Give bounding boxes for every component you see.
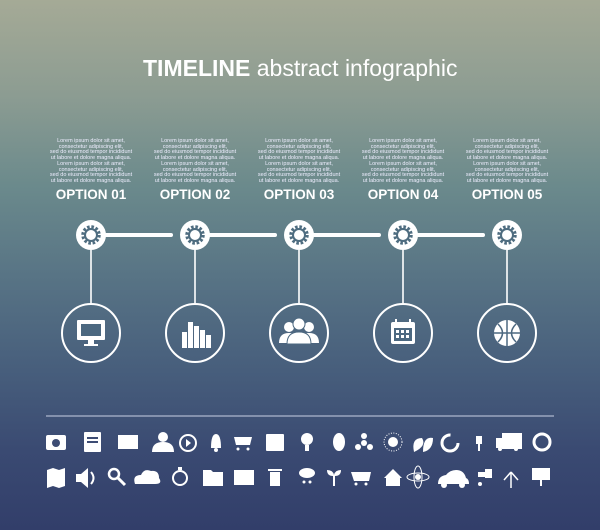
text block 3: consectetur adipiscing elit, [267,167,331,173]
text block 1: consectetur adipiscing elit, [59,167,123,173]
text block 5: Lorem ipsum dolor sit amet, [473,138,541,144]
text block 2: sed do eiusmod tempor incididunt [154,172,236,178]
text block 1: Lorem ipsum dolor sit amet, [57,138,125,144]
text block 5: consectetur adipiscing elit, [475,144,539,150]
option 01 label: OPTION 01 [56,187,126,202]
text block 4 [362,138,444,184]
text block 2: Lorem ipsum dolor sit amet, [161,161,229,167]
text block 5: consectetur adipiscing elit, [475,167,539,173]
text block 4: ut labore et dolore magna aliqua. [363,178,443,184]
icon row 2 [47,466,550,488]
text block 3 [258,138,340,184]
text block 5: sed do eiusmod tempor incididunt [466,172,548,178]
option 05 label: OPTION 05 [472,187,542,202]
option 04 label: OPTION 04 [368,187,438,202]
icon row 1 [46,432,550,452]
text block 2: consectetur adipiscing elit, [163,144,227,150]
text block 5: sed do eiusmod tempor incididunt [466,149,548,155]
text block 2: consectetur adipiscing elit, [163,167,227,173]
text block 4: consectetur adipiscing elit, [371,144,435,150]
text block 2 [154,138,236,184]
text block 3: ut labore et dolore magna aliqua. [259,155,339,161]
text block 5 [466,138,548,184]
text block 1: sed do eiusmod tempor incididunt [50,172,132,178]
text block 1: ut labore et dolore magna aliqua. [51,178,131,184]
icon: monitor [77,320,105,346]
text block 2: ut labore et dolore magna aliqua. [155,155,235,161]
text block 3: Lorem ipsum dolor sit amet, [265,161,333,167]
icon: globe [494,320,520,346]
text block 4: sed do eiusmod tempor incididunt [362,149,444,155]
text block 1: sed do eiusmod tempor incididunt [50,149,132,155]
text block 5: Lorem ipsum dolor sit amet, [473,161,541,167]
text block 3: ut labore et dolore magna aliqua. [259,178,339,184]
text block 1 [50,138,132,184]
text block 3: sed do eiusmod tempor incididunt [258,149,340,155]
divider [46,415,554,417]
text block 3: Lorem ipsum dolor sit amet, [265,138,333,144]
text block 1: ut labore et dolore magna aliqua. [51,155,131,161]
option 03 label: OPTION 03 [264,187,334,202]
icon: bar chart [182,322,211,348]
text block 4: Lorem ipsum dolor sit amet, [369,161,437,167]
text block 5: ut labore et dolore magna aliqua. [467,155,547,161]
text block 4: ut labore et dolore magna aliqua. [363,155,443,161]
text block 2: ut labore et dolore magna aliqua. [155,178,235,184]
text block 4: consectetur adipiscing elit, [371,167,435,173]
big circles [62,304,536,362]
timeline line [106,233,483,237]
gear nodes [76,220,522,250]
text block 3: sed do eiusmod tempor incididunt [258,172,340,178]
text block 4: Lorem ipsum dolor sit amet, [369,138,437,144]
title: TIMELINE abstract infographic [143,55,457,81]
text block 3: consectetur adipiscing elit, [267,144,331,150]
text block 1: Lorem ipsum dolor sit amet, [57,161,125,167]
icon: people [279,318,319,344]
vertical connectors [91,250,507,304]
text block 5: ut labore et dolore magna aliqua. [467,178,547,184]
icon: calendar [391,319,415,344]
option 02 label: OPTION 02 [160,187,230,202]
text block 1: consectetur adipiscing elit, [59,144,123,150]
text block 2: sed do eiusmod tempor incididunt [154,149,236,155]
text block 2: Lorem ipsum dolor sit amet, [161,138,229,144]
text block 4: sed do eiusmod tempor incididunt [362,172,444,178]
